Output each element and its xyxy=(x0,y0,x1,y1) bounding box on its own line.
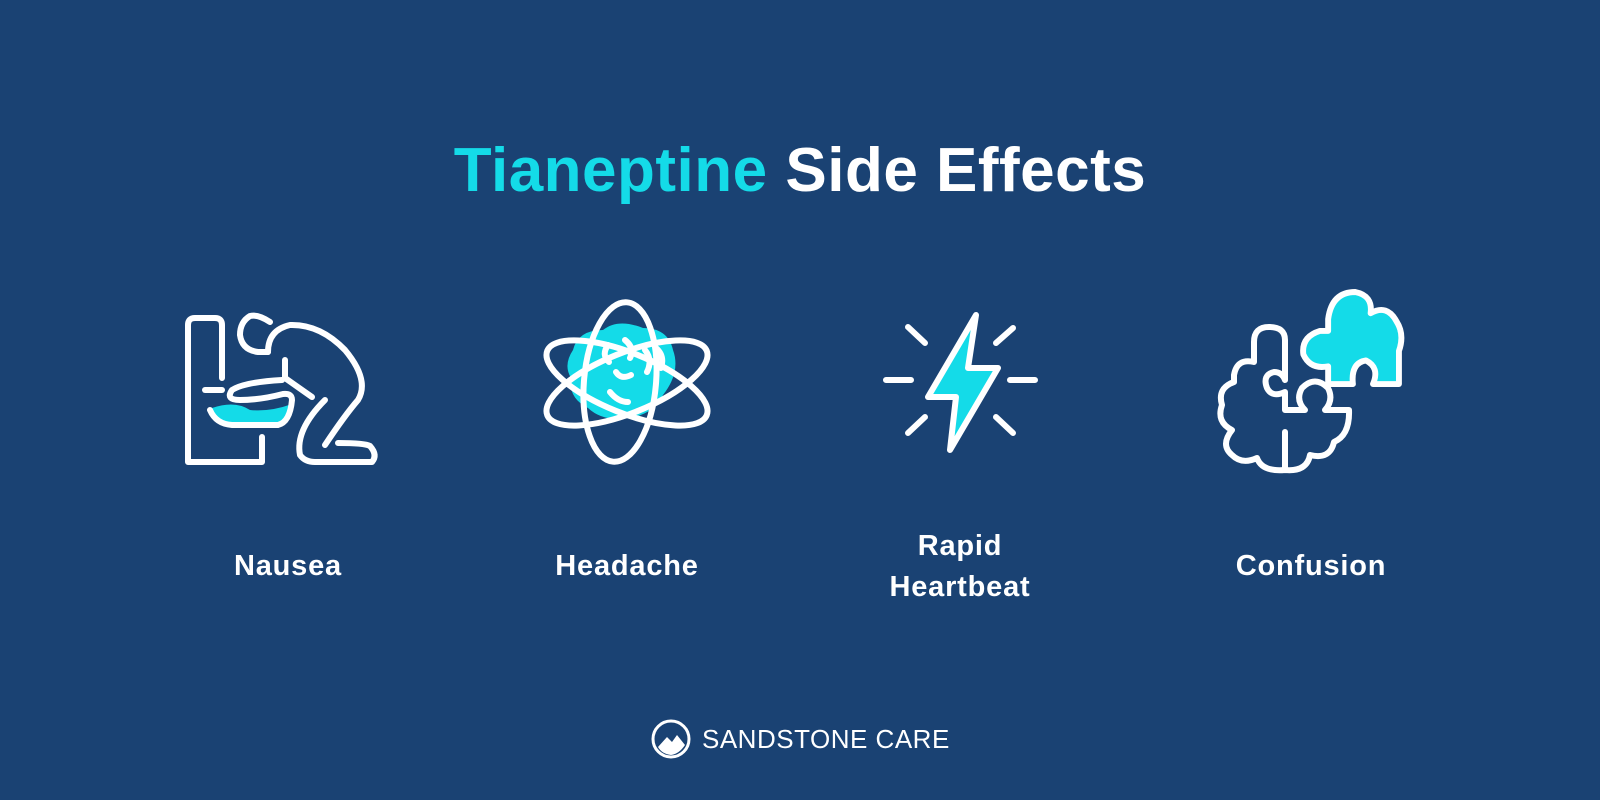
icon: nausea xyxy=(188,316,375,462)
icon: headache xyxy=(536,299,718,465)
logo text: SANDSTONE CARE xyxy=(702,724,950,754)
icon: logo xyxy=(653,721,689,757)
label: rapid heartbeat xyxy=(890,530,1030,603)
label: nausea: Nausea xyxy=(234,550,342,582)
label: headache: Headache xyxy=(555,550,699,582)
icon: rapid heartbeat xyxy=(886,315,1035,450)
label: confusion: Confusion xyxy=(1236,550,1386,582)
label: rapid heartbeat: Rapid xyxy=(918,530,1002,562)
icon: confusion xyxy=(1220,292,1401,470)
label: rapid heartbeat: Heartbeat xyxy=(890,571,1030,603)
title: Tianeptine Side Effects xyxy=(454,136,1146,205)
